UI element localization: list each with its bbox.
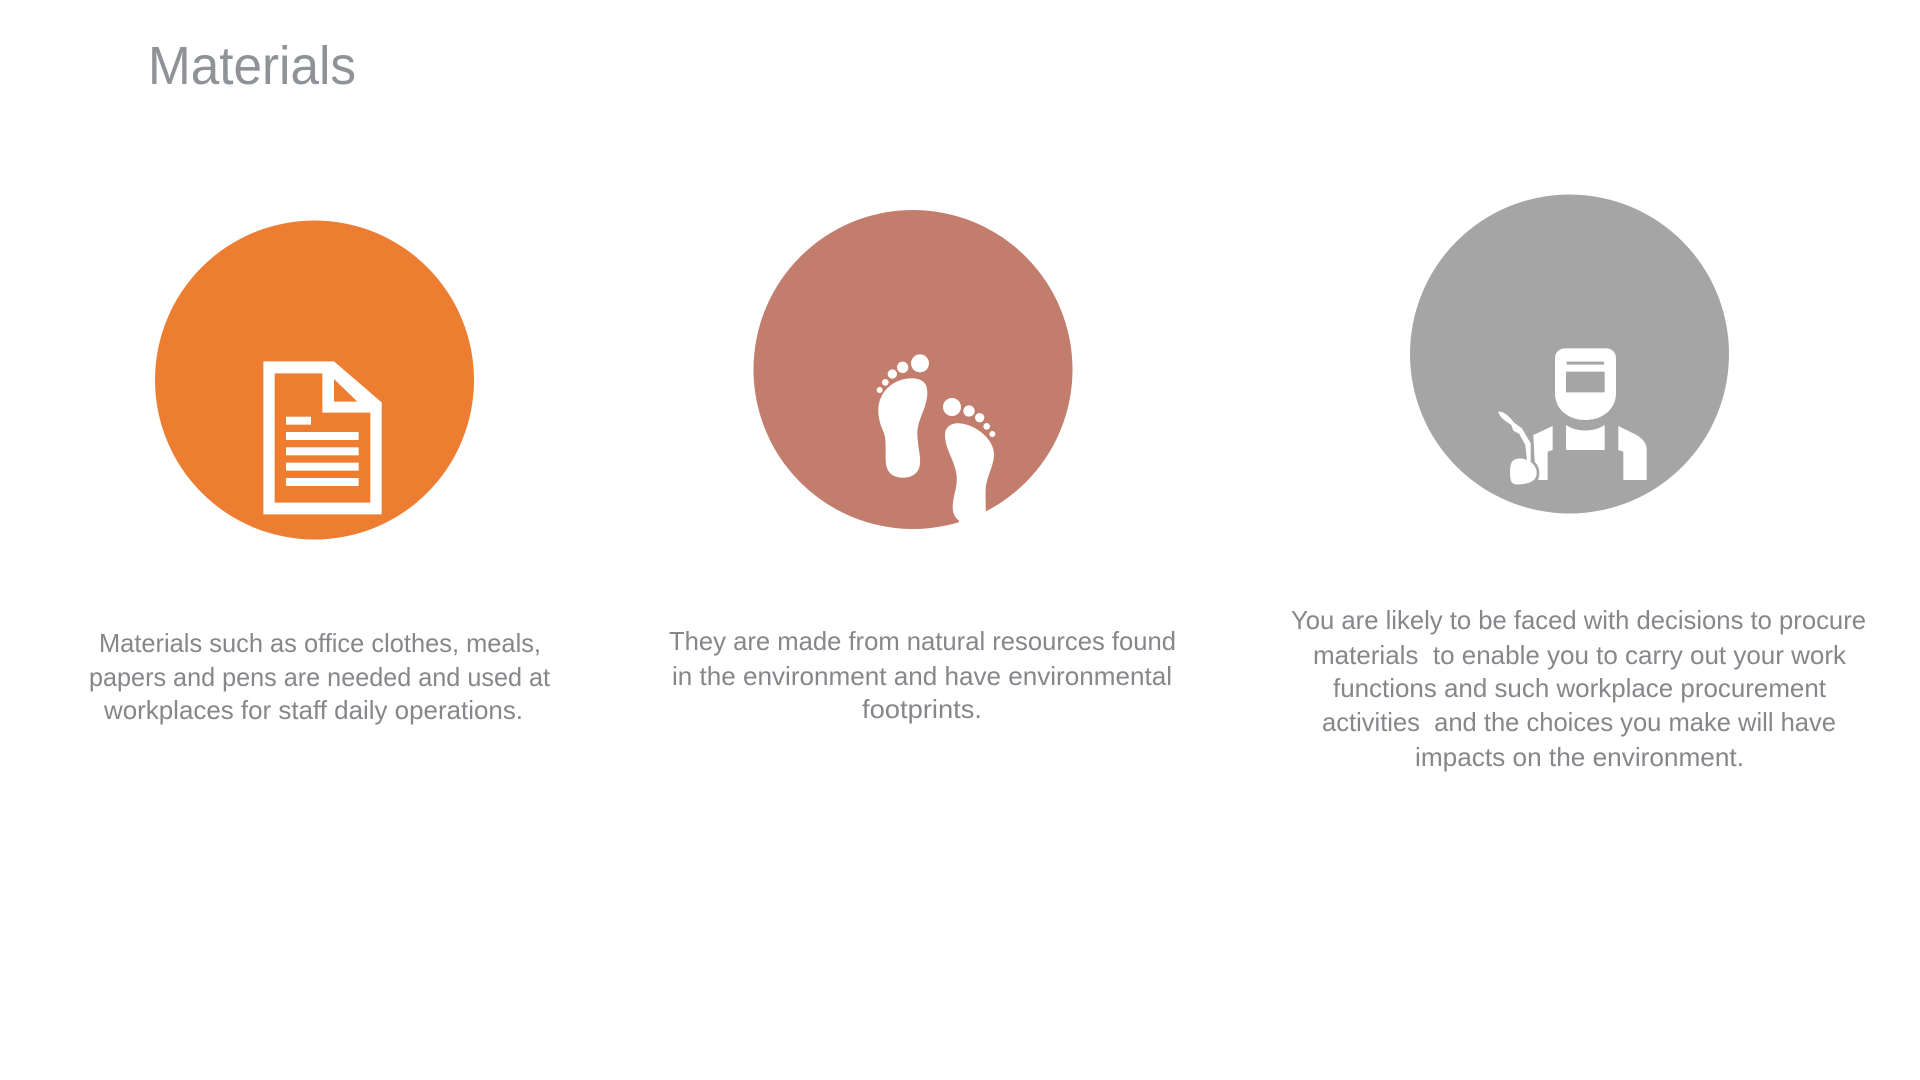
icon: welder [1498,348,1647,484]
gray circle [1410,194,1729,514]
icon: document [263,361,382,514]
panel: office materials [89,220,551,725]
text: environmental footprints description: in the environment and have environmental [672,661,1172,691]
text: workplace procurement description: functions and such workplace procurement [1333,673,1827,703]
text: environmental footprints description: They are made from natural resources found [669,626,1176,656]
icon: footprints [877,354,995,530]
panel: workplace procurement [1291,194,1866,772]
text: office materials description: Materials such as office clothes, meals, [99,628,541,658]
panel: environmental footprints [669,210,1176,724]
text: environmental footprints description [669,626,1176,724]
title: Materials [148,36,356,96]
text: office materials description: papers and pens are needed and used at [89,662,551,692]
text: workplace procurement description: impacts on the environment. [1415,742,1744,772]
text: workplace procurement description: materials to enable you to carry out your work [1313,640,1847,670]
text: environmental footprints description: footprints. [862,694,982,724]
text: office materials description: workplaces for staff daily operations. [103,695,523,725]
text: workplace procurement description: You are likely to be faced with decisions to procure [1291,605,1866,635]
text: office materials description [89,628,551,725]
text: workplace procurement description: activities and the choices you make will have [1322,707,1836,737]
rose circle [754,210,1072,529]
text: workplace procurement description [1291,605,1866,772]
orange circle [155,220,474,540]
